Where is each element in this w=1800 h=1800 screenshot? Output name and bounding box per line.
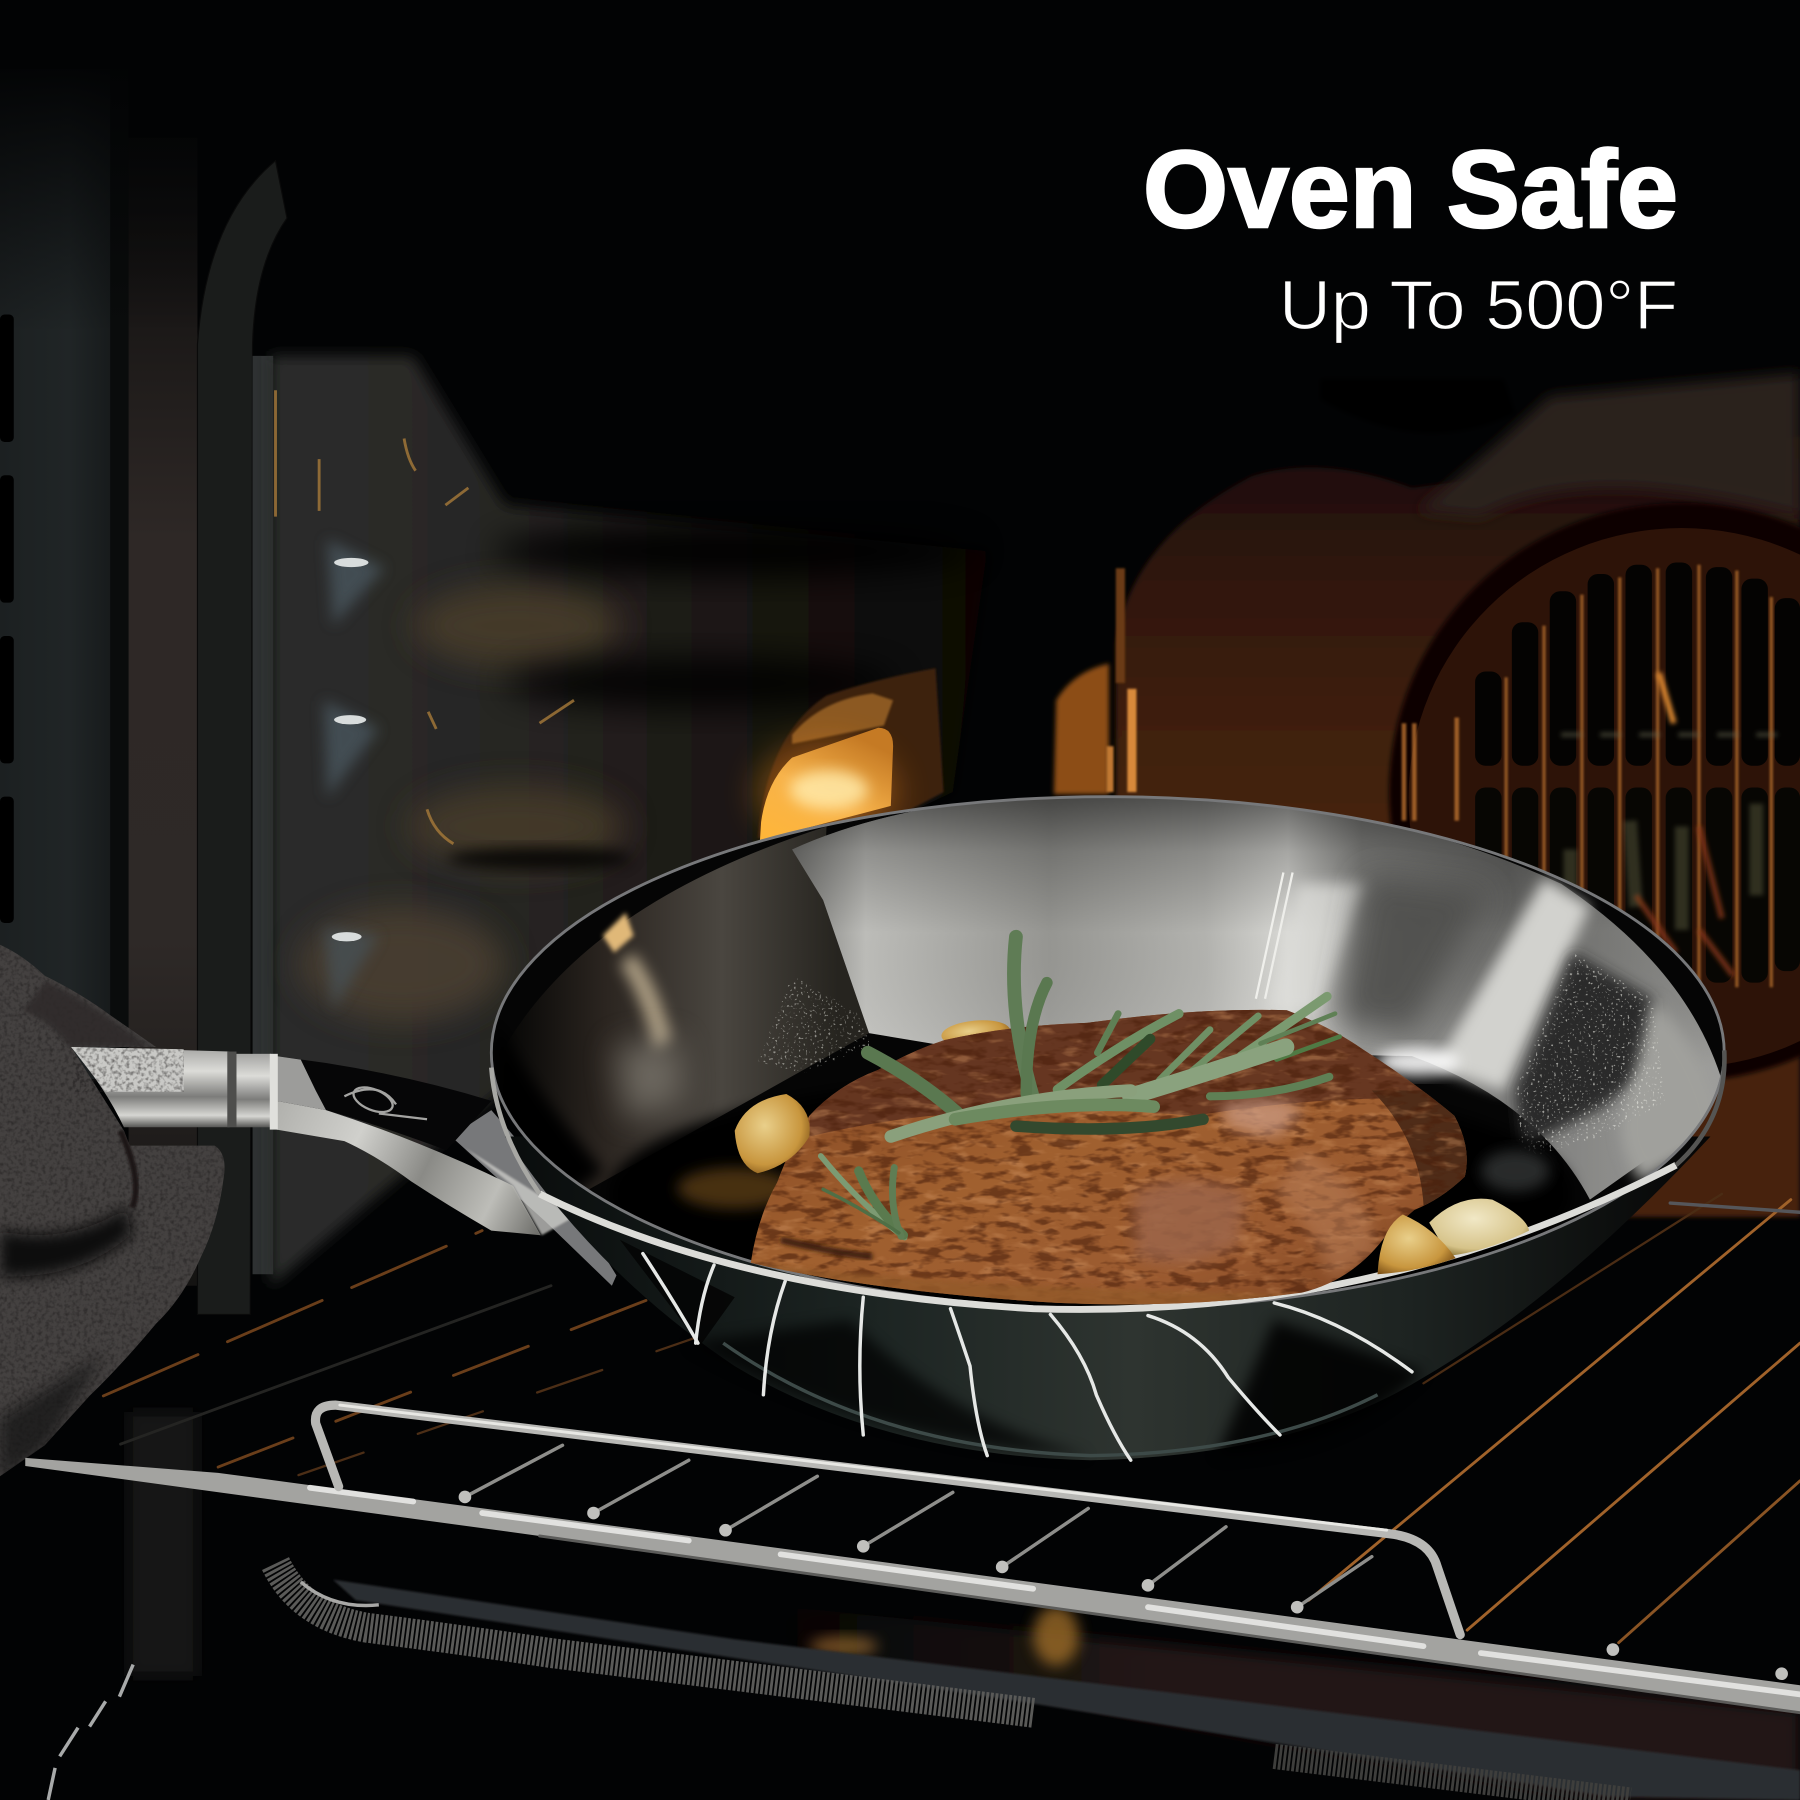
tray mesh seal — [276, 1564, 1630, 1800]
oven glove — [0, 941, 230, 1481]
fan cover grille — [1389, 503, 1800, 1081]
warm back wall — [1116, 373, 1800, 1217]
oven rack front rail — [25, 1405, 1800, 1713]
rosemary sprig small — [821, 1156, 905, 1238]
dim vertical strip below door — [129, 1412, 197, 1676]
steak — [746, 999, 1481, 1314]
heating element glimpses — [1561, 673, 1791, 976]
pan rim — [491, 797, 1724, 1309]
oven side wall with reflections — [253, 356, 987, 1286]
garlic cloves right — [1378, 1199, 1529, 1274]
lower tray — [333, 1580, 1800, 1800]
door hinge marks — [48, 1665, 133, 1800]
pan outer body — [505, 1136, 1710, 1460]
grille copper highlights — [1506, 565, 1771, 987]
rosemary sprig large — [868, 937, 1340, 1136]
subheading: Up To 500°F: Up To 500°F — [1279, 266, 1678, 344]
lower grille slots — [1475, 788, 1800, 983]
upper grille slots — [1475, 562, 1800, 766]
heading: Oven Safe: Oven Safe — [1143, 128, 1678, 251]
headline text — [1143, 128, 1678, 344]
door seal — [197, 161, 287, 1314]
pan handle — [71, 1047, 616, 1286]
garlic clove left — [735, 1094, 810, 1173]
pan body reflections — [643, 1254, 1412, 1460]
pan interior — [492, 792, 1728, 1314]
oven rack rear wires — [103, 1194, 1800, 1643]
warm edge light — [1054, 568, 1136, 794]
rear garlic clove — [940, 1018, 1011, 1049]
oven left frame with vents — [0, 57, 276, 1286]
oven lamp glow — [755, 668, 944, 843]
